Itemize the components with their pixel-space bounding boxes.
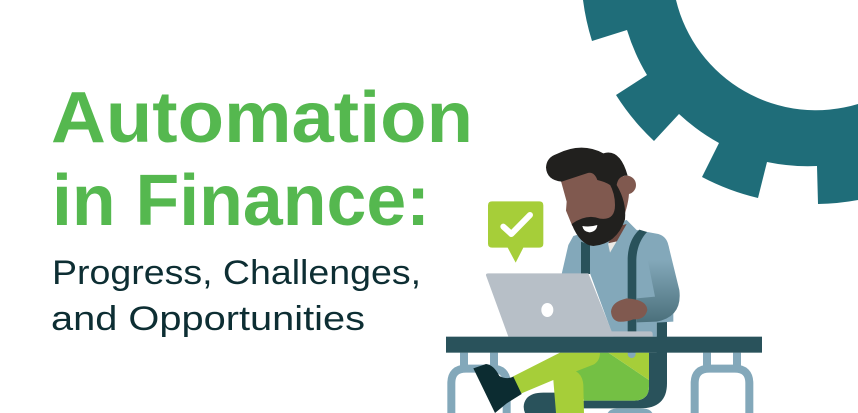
mouth: [582, 225, 597, 232]
desk: [446, 337, 762, 353]
ear: [617, 176, 636, 194]
suspender right: [628, 230, 647, 332]
subtitle: Progress, Challenges,: [52, 254, 421, 292]
hand: [611, 298, 647, 322]
neck: [608, 224, 627, 243]
title: in Finance:: [52, 161, 430, 241]
right chair frame: [695, 353, 749, 413]
bubble: [488, 201, 543, 263]
shorts: [575, 353, 649, 401]
title: Automation: [51, 78, 473, 158]
check mark: [503, 215, 530, 234]
title: [51, 78, 473, 241]
chair back and seat: [524, 320, 667, 413]
left chair frame: [451, 353, 507, 413]
illustration: man at desk with laptop: [446, 148, 762, 413]
boot: [473, 364, 522, 413]
beard: [572, 183, 625, 246]
hair: [546, 148, 628, 185]
laptop: [486, 273, 653, 337]
suspender left: [581, 242, 590, 274]
laptop screen: [486, 273, 653, 337]
chair base: [608, 409, 652, 413]
collar: [608, 241, 617, 253]
face: [561, 167, 629, 227]
icon: gear: [583, 0, 858, 204]
head: [546, 148, 636, 246]
leg: [513, 353, 600, 413]
icon: speech bubble with check mark: [488, 201, 543, 263]
shorts highlight: [608, 353, 649, 380]
laptop logo: [541, 303, 553, 317]
shirt button: [628, 350, 636, 358]
subtitle: [51, 254, 421, 338]
subtitle: and Opportunities: [51, 300, 365, 338]
shirt: [562, 220, 673, 337]
arm: [637, 245, 680, 322]
